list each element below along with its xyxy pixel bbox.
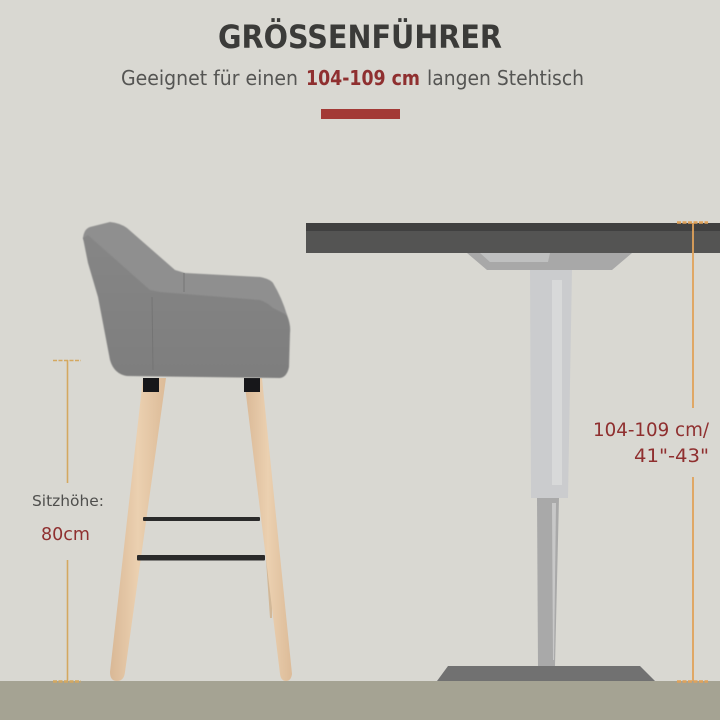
lower footrest — [137, 555, 265, 560]
red accent bar — [321, 109, 400, 119]
subtitle: 104-109 cm — [306, 66, 420, 90]
table height dimension line — [677, 222, 708, 682]
right wooden leg — [244, 378, 292, 681]
chair rear leg stub — [266, 560, 272, 618]
floor — [0, 681, 720, 720]
table height label — [593, 419, 710, 467]
seat height value: 80cm — [41, 524, 90, 545]
table top — [306, 223, 720, 253]
table height label: 104-109 cm/ — [593, 419, 710, 441]
subtitle: Geeignet für einen — [121, 66, 298, 90]
table foot — [437, 666, 655, 681]
black leg caps — [143, 378, 159, 392]
table bracket — [467, 253, 632, 270]
left wooden leg — [110, 378, 166, 681]
seat outer shell — [83, 235, 290, 378]
table leg upper — [530, 270, 572, 498]
chair — [83, 222, 292, 681]
chair seams — [152, 273, 184, 370]
seat inner back and cushion — [83, 222, 287, 320]
table height label: 41"-43" — [634, 445, 709, 467]
table — [306, 223, 720, 681]
subtitle: langen Stehtisch — [427, 66, 584, 90]
subtitle — [121, 66, 584, 90]
table leg lower — [537, 498, 559, 666]
upper footrest — [143, 517, 260, 521]
seat height label: Sitzhöhe: — [32, 492, 104, 510]
seat height dimension line — [53, 360, 81, 682]
title: GRÖSSENFÜHRER — [218, 18, 502, 56]
